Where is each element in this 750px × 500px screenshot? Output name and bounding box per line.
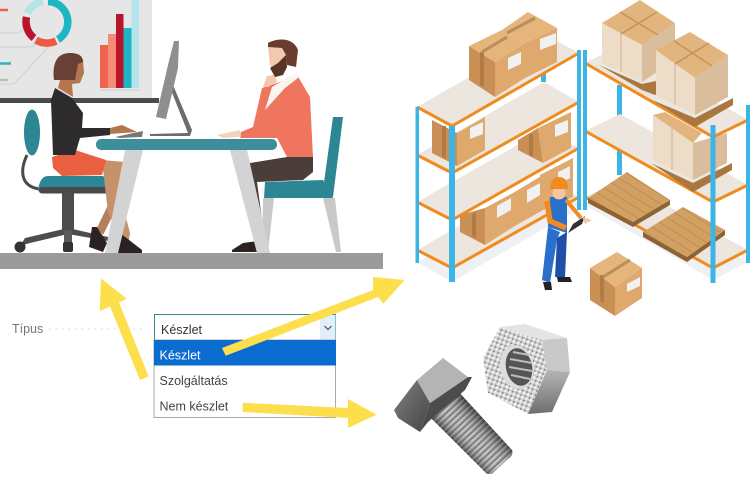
- left shelf top level with boxes: [417, 12, 579, 126]
- dropdown list: Szolgáltatás: [160, 374, 228, 388]
- panel: warehouse scene: [416, 0, 750, 316]
- panel: type dropdown: [12, 314, 336, 418]
- panel: office scene: [0, 0, 383, 269]
- presentation board: [0, 0, 159, 103]
- bar chart: [100, 0, 139, 90]
- arrow: to office: [100, 278, 149, 380]
- nut: [483, 324, 570, 414]
- desk: [96, 139, 277, 253]
- left shelf back post: [541, 72, 546, 82]
- donut chart: [26, 2, 68, 43]
- panel: bolt and nut: [394, 324, 570, 474]
- floor box: [590, 252, 642, 316]
- left shelf bottom level with boxes: [417, 158, 579, 268]
- floor shadows: [417, 190, 748, 282]
- dropdown field: Készlet: [161, 323, 203, 337]
- arrow: to bolt: [243, 399, 377, 428]
- floor: [0, 253, 383, 269]
- office chair: [14, 110, 109, 252]
- bolt: [394, 358, 512, 474]
- right shelf top level with stacks: [585, 0, 748, 137]
- worker: [542, 177, 592, 290]
- field label: Típus: [12, 322, 43, 336]
- computer monitor: [150, 41, 192, 136]
- woman: [51, 53, 143, 253]
- dropdown list: Készlet: [160, 348, 201, 362]
- right shelf bottom level with pallets: [585, 172, 748, 268]
- left shelf second level with box: [417, 82, 579, 173]
- right shelf middle level with stack: [585, 112, 748, 202]
- left shelf posts: [416, 50, 581, 282]
- dropdown field: [154, 314, 336, 340]
- dropdown list: Nem készlet: [160, 400, 229, 414]
- arrow: to warehouse: [222, 277, 405, 356]
- man's chair: [262, 117, 343, 252]
- right shelf back post: [617, 85, 622, 175]
- right shelf posts: [583, 50, 750, 283]
- left shelf third level with box: [417, 112, 579, 220]
- dotted leader: [49, 328, 144, 330]
- man: [217, 40, 313, 252]
- dropdown list: [154, 340, 336, 418]
